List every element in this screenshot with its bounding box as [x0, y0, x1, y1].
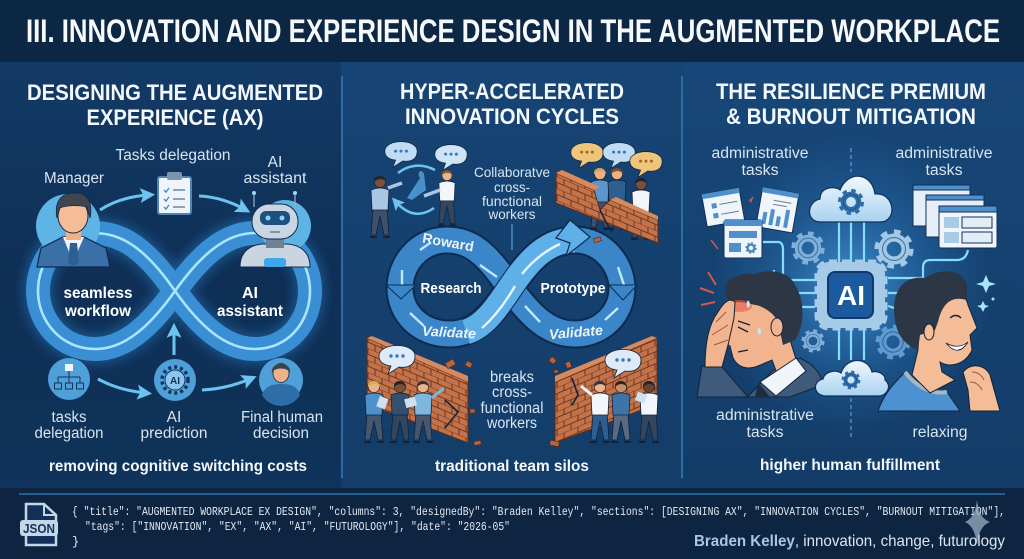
label: seamless workflow: seamless — [64, 285, 133, 302]
arrow: manager to clipboard — [100, 195, 148, 210]
panel: hyper-accelerated innovation cycles — [341, 62, 682, 490]
icon: right task windows — [913, 185, 997, 248]
dashed connectors — [850, 148, 852, 440]
label: administrative tasks bottom: tasks — [746, 424, 784, 441]
label: administrative tasks right: administrative — [896, 145, 992, 162]
icon: lower cloud with gear — [815, 360, 889, 396]
label: administrative tasks right: tasks — [926, 162, 963, 179]
panel: designing the augmented experience — [0, 62, 341, 490]
label: manager: Manager — [44, 170, 104, 187]
illustration: traditional silo wall left — [364, 336, 468, 443]
arrow: prediction to decision — [202, 379, 250, 390]
label: tasks delegation bottom: delegation — [34, 425, 104, 442]
caption: removing cognitive switching costs: removing cognitive switching costs — [49, 458, 307, 475]
circuit lines — [763, 222, 968, 360]
icon: sparkles — [976, 275, 996, 312]
label: AI prediction — [140, 409, 208, 442]
label: administrative tasks bottom: administrative — [716, 407, 814, 424]
illustration: stressed worker — [697, 271, 822, 397]
label: Validate right: Validate — [548, 322, 604, 342]
footer panel — [0, 488, 1024, 559]
arrow: clipboard to robot — [199, 196, 244, 209]
icon: robot assistant — [240, 191, 311, 267]
label: AI prediction: prediction — [140, 425, 208, 442]
label: final human decision — [241, 409, 323, 442]
label: Roward: Roward — [421, 230, 475, 254]
panel heading: innovation cycles: HYPER-ACCELERATED — [400, 79, 624, 104]
label: AI assistant top: assistant — [244, 170, 307, 187]
label: breaks cross-functional workers: cross- — [492, 384, 532, 401]
label: administrative tasks left: tasks — [742, 162, 779, 179]
icon: JSON file — [20, 504, 58, 545]
label: seamless workflow: workflow — [64, 303, 132, 320]
icon: manager — [36, 193, 110, 267]
panel heading: designing AX: DESIGNING THE AUGMENTED — [27, 80, 323, 105]
label: AI assistant: assistant — [217, 303, 284, 320]
icon: left task windows — [701, 187, 799, 258]
icon: tasks delegation hierarchy — [48, 358, 90, 400]
icon: AI chip: AI — [837, 280, 865, 311]
arrow: prediction up to loop — [172, 330, 176, 355]
icon: clipboard — [158, 172, 191, 214]
label: Validate left: Validate — [422, 323, 477, 341]
icon: lower left gear — [803, 331, 823, 351]
icon: JSON file: JSON — [23, 521, 55, 536]
JSON code block: "tags": ["INNOVATION", "EX", "AX", "AI", "FUTUROLOGY"], "date": "2026-05" — [85, 520, 510, 534]
label: collaborative workers: workers — [488, 206, 536, 222]
credit line: Braden Kelley, innovation, change, futurology — [694, 533, 1005, 550]
panel heading: innovation cycles — [400, 79, 624, 129]
label: breaks cross-functional workers: workers — [486, 415, 537, 432]
label: AI assistant: AI — [242, 285, 258, 302]
icon: lower right gear — [879, 328, 907, 356]
label: administrative tasks left: administrative — [712, 145, 808, 162]
illustration: relaxed worker — [878, 271, 1000, 411]
JSON code block — [72, 505, 1005, 549]
column divider right — [681, 76, 683, 478]
column divider left — [341, 76, 343, 478]
central glow — [711, 135, 991, 435]
label: AI assistant top: AI — [268, 154, 282, 171]
label: tasks delegation bottom — [34, 409, 104, 442]
panel heading: resilience premium — [716, 79, 986, 129]
label: final human decision: decision — [253, 425, 309, 442]
infinity loop: innovation cycle — [400, 240, 624, 334]
label: breaks cross-functional workers — [480, 369, 544, 432]
label: administrative tasks left — [712, 145, 808, 179]
illustration: traditional silo wall right — [555, 336, 659, 443]
panel heading: resilience premium: THE RESILIENCE PREMIUM — [716, 79, 986, 104]
label: administrative tasks right — [896, 145, 992, 179]
icon: AI prediction gear: AI — [170, 376, 180, 387]
panel heading: innovation cycles: INNOVATION CYCLES — [405, 104, 619, 129]
circuit nodes — [770, 290, 926, 314]
caption: higher human fulfillment: higher human fulfillment — [760, 457, 941, 474]
panel heading: designing AX: EXPERIENCE (AX) — [86, 105, 264, 130]
label: relaxing: relaxing — [912, 424, 968, 441]
label: AI assistant top — [244, 154, 307, 187]
icon: upper left gear — [794, 234, 822, 262]
icon: AI prediction gear — [154, 359, 196, 401]
arrow: delegation to prediction — [98, 379, 145, 393]
label: breaks cross-functional workers: breaks — [490, 369, 534, 386]
arrowhead: cycle forward — [556, 220, 590, 256]
label: AI prediction: AI — [167, 409, 181, 426]
panel heading: resilience premium: & BURNOUT MITIGATION — [726, 104, 976, 129]
JSON code block: } — [72, 535, 79, 549]
panel heading: designing AX — [27, 80, 323, 130]
label: AI assistant — [217, 285, 284, 320]
decorative star — [965, 500, 990, 545]
label: tasks delegation bottom: tasks — [52, 409, 87, 426]
header bar — [0, 0, 1024, 62]
panel: resilience premium and burnout mitigation — [682, 62, 1024, 490]
label: collaborative workers: Collaboratve — [474, 164, 550, 180]
infinity loop: seamless workflow — [38, 233, 310, 349]
arrowhead: right loop down — [609, 285, 637, 300]
label: collaborative workers: cross- — [494, 179, 530, 195]
icon: upper right gear — [878, 233, 910, 265]
illustration: collaborating workers — [370, 142, 467, 238]
rubble bricks — [445, 237, 601, 447]
label: seamless workflow — [64, 285, 133, 320]
label: breaks cross-functional workers: functional — [480, 400, 544, 417]
illustration: broken wall with team — [556, 143, 662, 243]
icon: AI chip — [817, 262, 885, 328]
icon: top cloud with gear — [810, 176, 892, 222]
connector line — [511, 224, 513, 250]
caption: traditional team silos: traditional team silos — [435, 458, 589, 475]
label: tasks delegation: Tasks delegation — [116, 147, 230, 164]
label: Research: Research — [420, 280, 482, 297]
label: collaborative workers — [474, 164, 550, 222]
label: final human decision: Final human — [241, 409, 323, 426]
label: administrative tasks bottom — [716, 407, 814, 441]
arrowhead: left loop down — [386, 285, 416, 299]
icon: human decision — [259, 358, 303, 406]
label: collaborative workers: functional — [482, 193, 542, 209]
label: Prototype: Prototype — [540, 280, 606, 297]
